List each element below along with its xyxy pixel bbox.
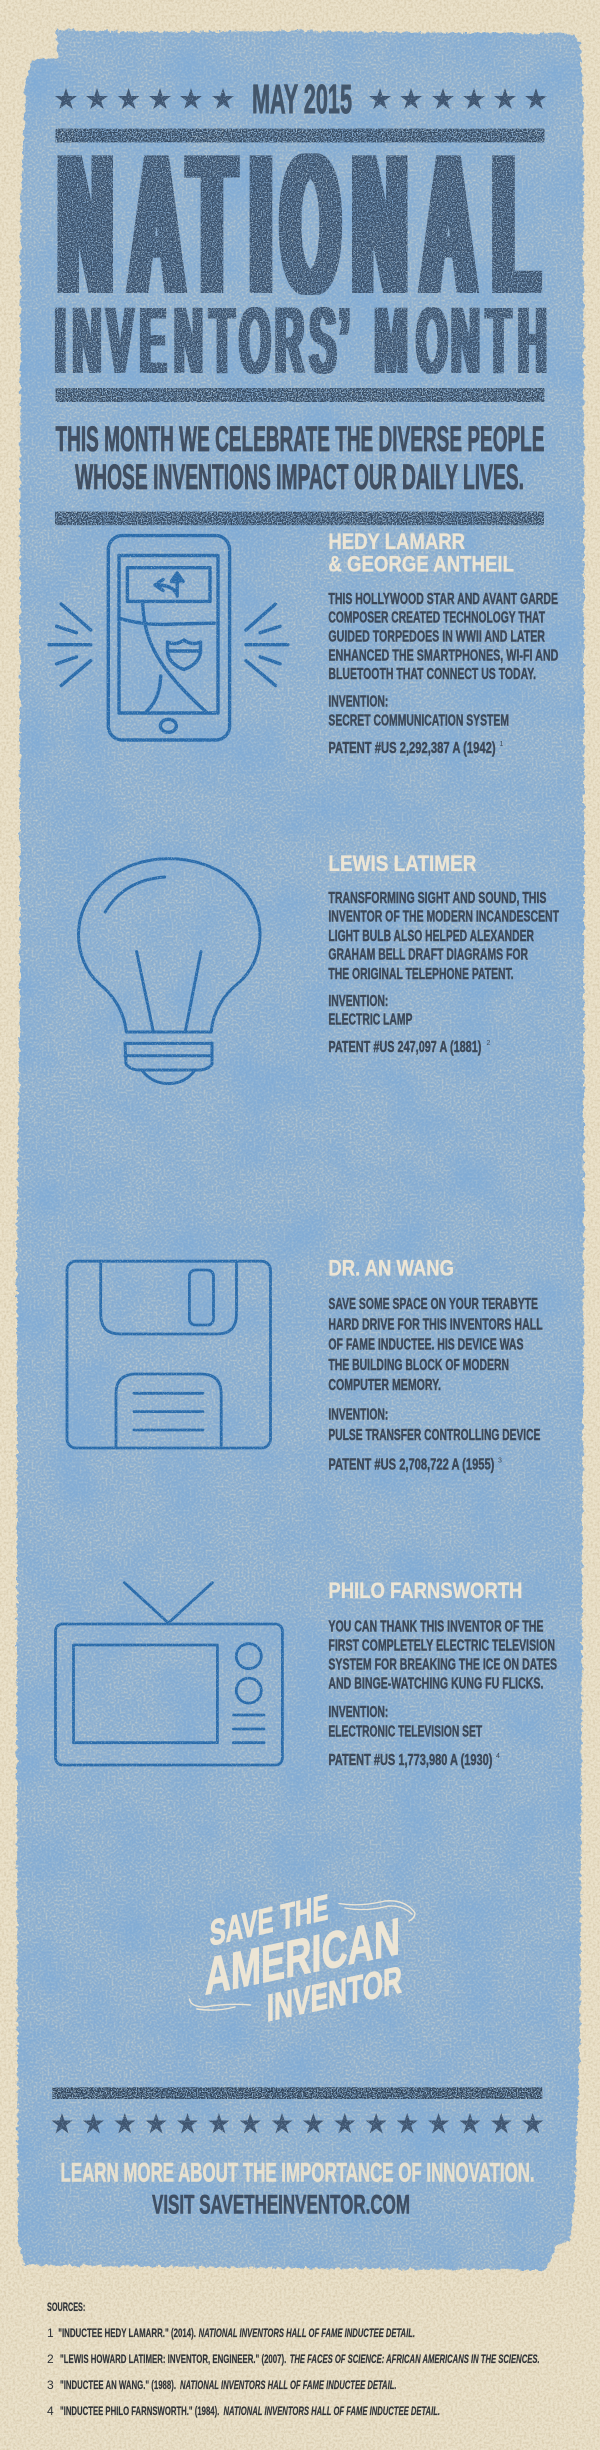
invention and patent: INVENTION: <box>328 1407 388 1424</box>
heading <box>328 529 514 577</box>
row of stars <box>52 2113 543 2134</box>
icon: television <box>56 1583 282 1765</box>
divider bar top <box>56 129 544 142</box>
source 1: NATIONAL INVENTORS HALL OF FAME INDUCTEE DETAIL. <box>199 2326 415 2340</box>
stars left of date <box>55 88 234 109</box>
invention and patent <box>328 993 481 1056</box>
description <box>328 591 558 683</box>
description <box>328 1618 557 1692</box>
source 4 <box>47 2404 440 2418</box>
sources <box>47 2300 540 2418</box>
heading: DR. AN WANG <box>328 1255 454 1280</box>
source 4: 4 <box>47 2404 54 2418</box>
text block: Dr. An Wang <box>328 1255 543 1473</box>
tagline <box>56 420 544 497</box>
source 4: NATIONAL INVENTORS HALL OF FAME INDUCTEE DETAIL. <box>224 2404 440 2418</box>
invention and patent <box>328 1407 541 1473</box>
description: THE BUILDING BLOCK OF MODERN <box>328 1357 509 1374</box>
source 3: "INDUCTEE AN WANG." (1988). <box>60 2378 176 2392</box>
source 1: 1 <box>47 2326 54 2340</box>
title: INVENTORS' MONTH: INVENTORS’ MONTH <box>55 288 547 394</box>
source 4: "INDUCTEE PHILO FARNSWORTH." (1984). <box>60 2404 219 2418</box>
invention and patent: PATENT #US 1,773,980 A (1930) <box>328 1752 492 1769</box>
source 2: 2 <box>47 2352 54 2366</box>
source 2: "LEWIS HOWARD LATIMER: INVENTOR, ENGINEER." (2007). <box>60 2352 286 2366</box>
divider bar bottom <box>52 2087 542 2099</box>
source 3: 3 <box>47 2378 54 2392</box>
title: NATIONAL: NATIONAL <box>59 111 538 335</box>
heading: LEWIS LATIMER <box>328 851 476 876</box>
invention and patent: SECRET COMMUNICATION SYSTEM <box>328 712 509 729</box>
invention and patent: PATENT #US 2,292,387 A (1942) <box>328 740 496 757</box>
invention and patent: INVENTION: <box>328 694 388 711</box>
divider bar lower <box>55 512 544 525</box>
source 1 <box>47 2326 415 2340</box>
source 3: NATIONAL INVENTORS HALL OF FAME INDUCTEE DETAIL. <box>180 2378 396 2392</box>
description <box>328 1296 543 1394</box>
icon: smartphone with map <box>49 536 288 740</box>
invention and patent: PATENT #US 2,708,722 A (1955) <box>328 1456 494 1473</box>
heading: PHILO FARNSWORTH <box>328 1578 522 1603</box>
invention and patent: ELECTRONIC TELEVISION SET <box>328 1724 482 1740</box>
header: date row with stars <box>55 76 547 122</box>
description: COMPUTER MEMORY. <box>328 1377 441 1394</box>
divider bar middle <box>56 388 544 402</box>
source 1: "INDUCTEE HEDY LAMARR." (2014). <box>58 2326 196 2340</box>
description <box>328 890 559 983</box>
text block: Lewis Latimer <box>328 851 559 1056</box>
footnote 2: 2 <box>486 1040 490 1047</box>
heading: HEDY LAMARR <box>328 529 465 554</box>
source 3 <box>47 2378 396 2392</box>
text block: Hedy Lamarr and George Antheil <box>328 529 558 757</box>
stars right of date <box>369 88 547 109</box>
invention and patent: ELECTRIC LAMP <box>328 1012 413 1029</box>
date text: MAY 2015 <box>252 76 352 122</box>
invention and patent <box>328 694 509 757</box>
footnote 1: 1 <box>500 741 504 748</box>
invention and patent: INVENTION: <box>328 993 388 1010</box>
footnote 4: 4 <box>496 1753 500 1760</box>
logo: Save the American Inventor <box>189 1886 415 2030</box>
logo: Save the American Inventor: INVENTOR <box>267 1959 402 2030</box>
invention and patent: INVENTION: <box>328 1704 388 1721</box>
invention and patent: PATENT #US 247,097 A (1881) <box>328 1039 481 1056</box>
icon: light bulb <box>78 859 260 1084</box>
footnote 3: 3 <box>498 1458 502 1464</box>
invention and patent <box>328 1704 492 1769</box>
sources: SOURCES: <box>47 2300 85 2314</box>
logo: Save the American Inventor: SAVE THE <box>210 1886 328 1954</box>
heading: & GEORGE ANTHEIL <box>328 552 514 577</box>
logo: Save the American Inventor: AMERICAN <box>205 1907 400 2007</box>
text block: Philo Farnsworth <box>328 1578 557 1769</box>
call to action: website: VISIT SAVETHEINVENTOR.COM <box>152 2190 410 2220</box>
icon: floppy disk <box>67 1261 270 1448</box>
